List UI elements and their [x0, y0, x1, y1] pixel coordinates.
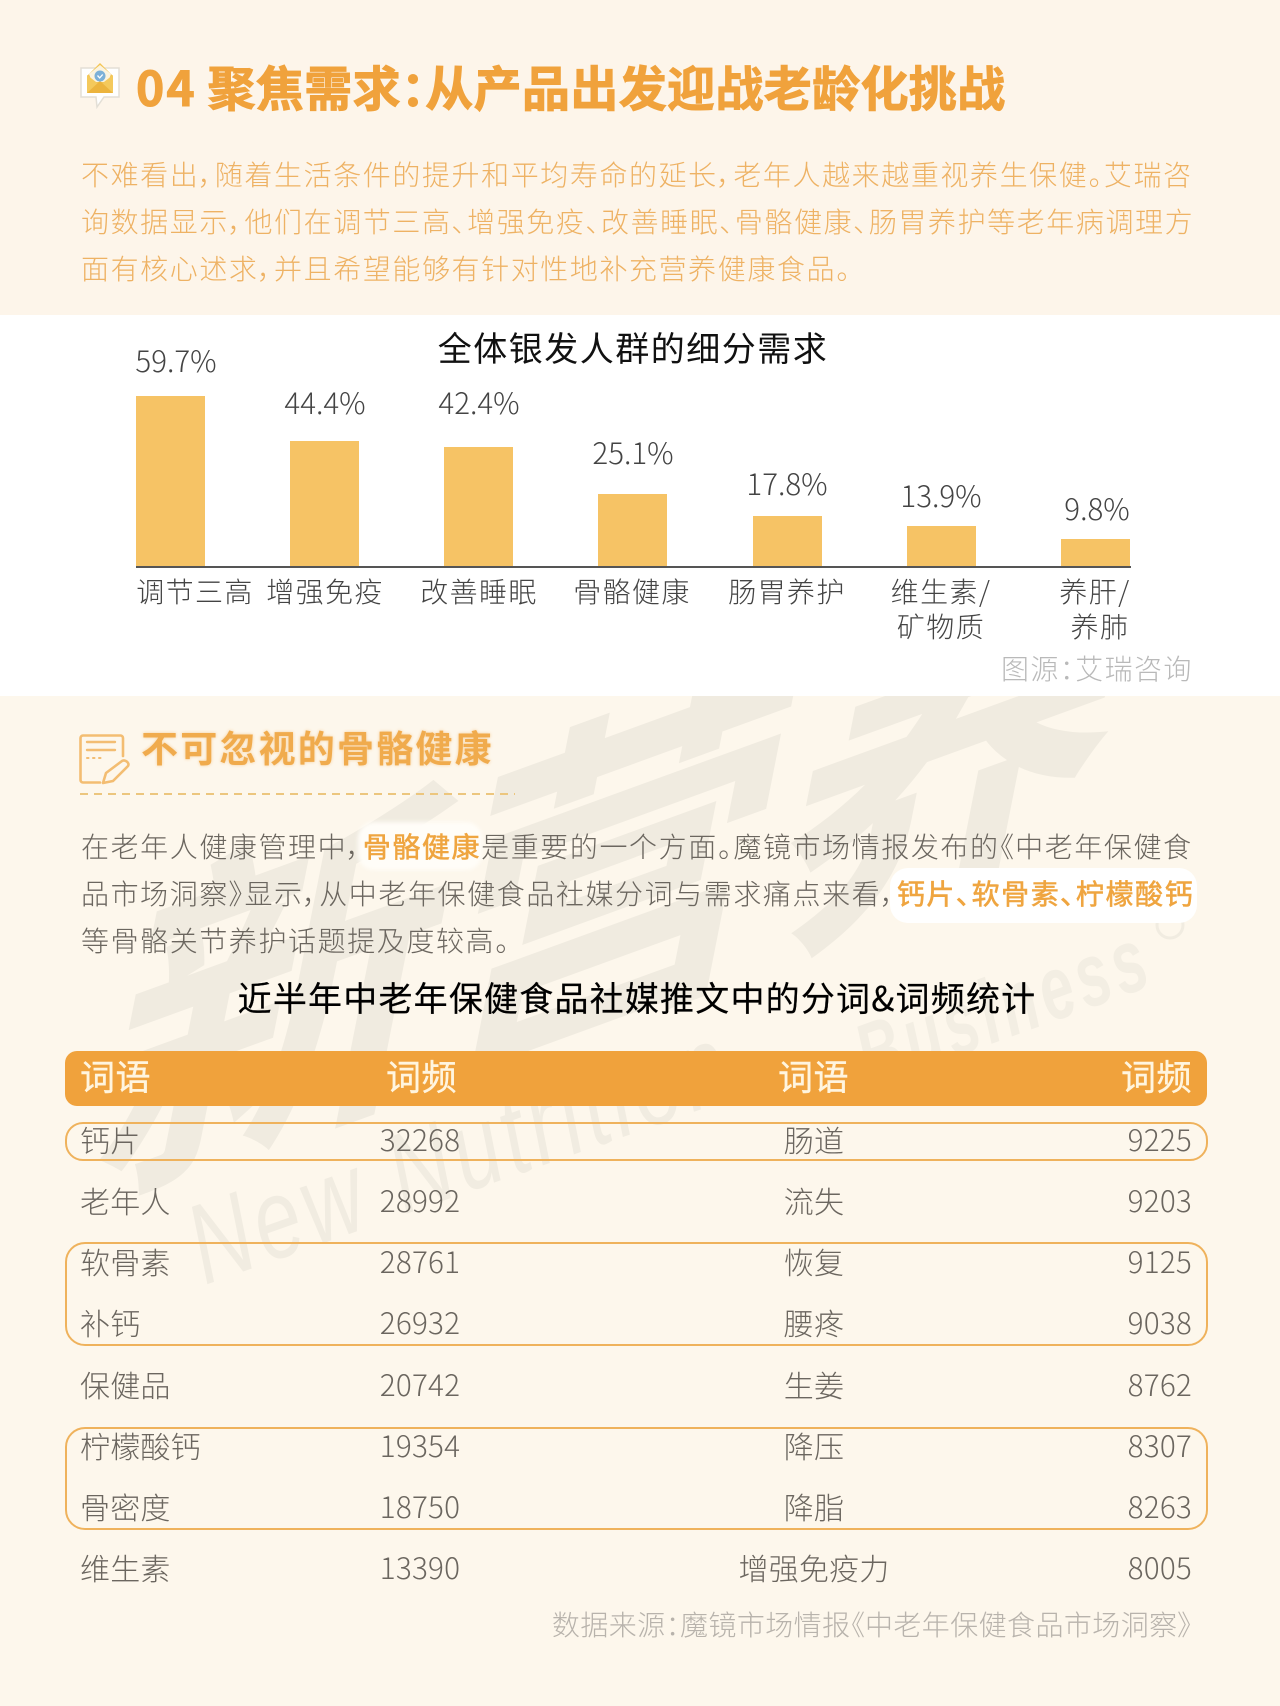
intro paragraph: 不难看出，随着生活条件的提升和平均寿命的延长，老年人越来越重视养生保健。艾瑞咨 — [81, 154, 1193, 194]
icon: note and pencil — [79, 734, 130, 784]
section paragraph — [81, 821, 1197, 960]
panel: bar chart — [0, 315, 1280, 696]
row: 13390 — [380, 1545, 460, 1588]
highlight frame: row 1 — [65, 1122, 1208, 1161]
row: 8762 — [1128, 1362, 1192, 1405]
row: 26932 — [380, 1300, 460, 1343]
category labels: 养肺 — [1071, 606, 1129, 646]
value labels: 9.8% — [1064, 487, 1130, 529]
row: 8307 — [1128, 1423, 1192, 1466]
row: 保健品 — [80, 1362, 171, 1406]
row: 补钙 — [80, 1300, 140, 1344]
row: 8263 — [1128, 1484, 1192, 1527]
row — [80, 1423, 1192, 1467]
table header — [65, 1051, 1207, 1106]
row: 腰疼 — [784, 1300, 844, 1344]
row — [80, 1117, 1192, 1161]
row — [80, 1545, 1192, 1589]
data source: 数据来源：魔镜市场情报《中老年保健食品市场洞察》 — [552, 1604, 1192, 1644]
row: 28761 — [380, 1239, 460, 1282]
row: 流失 — [784, 1178, 844, 1222]
row: 9203 — [1128, 1178, 1192, 1221]
category labels: 养肝/ — [1059, 571, 1131, 611]
row — [80, 1300, 1192, 1344]
value labels: 42.4% — [438, 381, 520, 423]
category labels — [136, 571, 1131, 646]
table header: 词频 — [386, 1050, 457, 1101]
table header: 词语 — [778, 1050, 849, 1101]
bars — [136, 396, 1131, 568]
row: 9038 — [1128, 1300, 1192, 1343]
value labels: 13.9% — [900, 474, 982, 516]
watermark: Business — [843, 908, 1165, 1107]
row: 增强免疫力 — [738, 1545, 890, 1589]
row: 柠檬酸钙 — [80, 1423, 201, 1467]
value labels: 25.1% — [592, 431, 674, 473]
panel: bottom section with watermark — [0, 696, 1280, 1706]
value labels: 59.7% — [135, 339, 217, 381]
row — [80, 1178, 1192, 1222]
row: 19354 — [380, 1423, 460, 1466]
row: 28992 — [380, 1178, 460, 1221]
value labels: 44.4% — [284, 381, 366, 423]
section paragraph: 在老年人健康管理中，骨骼健康是重要的一个方面。魔镜市场情报发布的《中老年保健食 — [81, 826, 1193, 866]
row: 生姜 — [784, 1362, 844, 1406]
row: 钙片 — [80, 1117, 140, 1161]
section paragraph: 等骨骼关节养护话题提及度较高。 — [81, 920, 511, 960]
row: 肠道 — [784, 1117, 844, 1161]
title: 04 聚焦需求：从产品出发迎战老龄化挑战 — [136, 50, 1006, 120]
intro paragraph — [81, 154, 1194, 288]
category labels: 改善睡眠 — [420, 571, 538, 611]
highlight frame: rows 3-4 — [65, 1242, 1208, 1346]
row: 维生素 — [80, 1545, 171, 1589]
category labels: 增强免疫 — [266, 571, 384, 611]
panel: intro background — [0, 0, 1280, 315]
category labels: 维生素/ — [891, 571, 991, 611]
row: 恢复 — [784, 1239, 844, 1283]
category labels: 肠胃养护 — [728, 571, 846, 611]
dashed divider — [80, 793, 515, 794]
table header: 词语 — [80, 1050, 151, 1101]
table header: 词频 — [1121, 1050, 1192, 1101]
intro paragraph: 询数据显示，他们在调节三高、增强免疫、改善睡眠、骨骼健康、肠胃养护等老年病调理方 — [81, 201, 1194, 241]
row: 老年人 — [80, 1178, 171, 1222]
row: 18750 — [380, 1484, 460, 1527]
table title: 近半年中老年保健食品社媒推文中的分词&词频统计 — [238, 972, 1036, 1021]
row: 软骨素 — [80, 1239, 171, 1283]
intro paragraph: 面有核心述求，并且希望能够有针对性地补充营养健康食品。 — [81, 248, 852, 288]
row: 9125 — [1128, 1239, 1192, 1282]
category labels: 矿物质 — [897, 606, 985, 646]
watermark: New Nutrition — [171, 1000, 750, 1309]
icon: envelope speech bubble — [80, 63, 120, 109]
highlight frame: rows 6-7 — [65, 1427, 1208, 1530]
row: 32268 — [380, 1117, 460, 1160]
section paragraph: 品市场洞察》显示，从中老年保健食品社媒分词与需求痛点来看，钙片、软骨素、柠檬酸钙 — [81, 873, 1194, 913]
row: 20742 — [380, 1362, 460, 1405]
chart title: 全体银发人群的细分需求 — [438, 322, 828, 371]
row — [80, 1484, 1192, 1528]
table rows — [80, 1117, 1192, 1589]
row — [80, 1362, 1192, 1406]
row: 降压 — [784, 1423, 844, 1467]
chart source: 图源：艾瑞咨询 — [1001, 648, 1193, 688]
row: 8005 — [1128, 1545, 1192, 1588]
row — [80, 1239, 1192, 1283]
highlight glow — [358, 822, 482, 870]
row: 9225 — [1128, 1117, 1192, 1160]
row: 骨密度 — [80, 1484, 171, 1528]
value labels: 17.8% — [746, 462, 828, 504]
section heading: 不可忽视的骨骼健康 — [141, 719, 494, 773]
category labels: 骨骼健康 — [573, 571, 691, 611]
row: 降脂 — [784, 1484, 844, 1528]
value labels — [135, 339, 1130, 529]
category labels: 调节三高 — [136, 571, 254, 611]
highlight pill — [890, 868, 1197, 923]
